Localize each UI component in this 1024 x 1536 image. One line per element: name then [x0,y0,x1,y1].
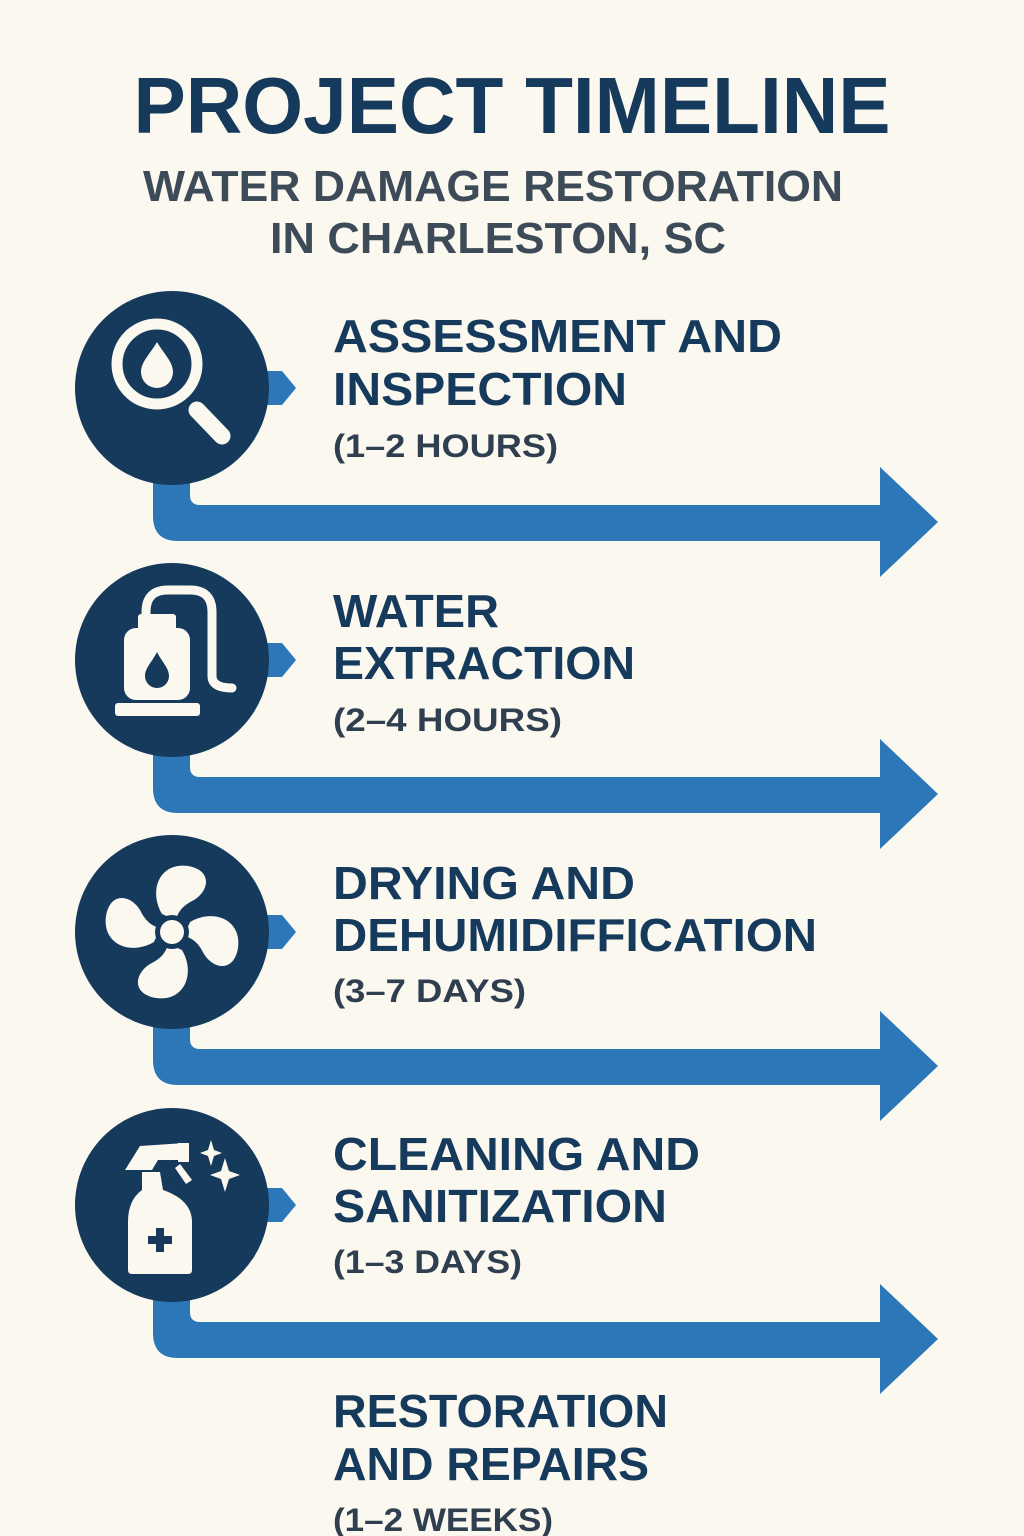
icon: magnifier with drop [75,291,296,485]
step 3: drying: DEHUMIDIFFICATION [333,909,817,961]
step 5: restoration [333,1385,668,1536]
step 2: extraction [75,563,635,757]
step 3: drying [75,835,817,1029]
step 5: restoration: AND REPAIRS [333,1438,649,1490]
step 4: cleaning [75,1108,700,1302]
duration: (1–2 HOURS) [333,428,558,464]
subtitle [143,162,843,263]
duration: (3–7 DAYS) [333,973,526,1009]
heading: WATER [333,585,499,637]
heading: ASSESSMENT AND [333,310,782,362]
step 4: cleaning: SANITIZATION [333,1180,667,1232]
title: PROJECT TIMELINE [134,61,890,150]
heading: DRYING AND [333,857,635,909]
subtitle: IN CHARLESTON, SC [270,214,726,263]
icon: spray bottle [75,1108,296,1302]
icon: wet vac [75,563,296,757]
arrow: step 1 to 2 [153,467,938,577]
subtitle: WATER DAMAGE RESTORATION [143,162,843,211]
step 1: assessment: INSPECTION [333,363,627,415]
arrow: step 2 to 3 [153,739,938,849]
heading: RESTORATION [333,1385,668,1437]
step 2: extraction: EXTRACTION [333,637,635,689]
heading: CLEANING AND [333,1128,700,1180]
arrow: step 3 to 4 [153,1011,938,1121]
duration: (1–3 DAYS) [333,1244,522,1280]
step 1: assessment [75,291,782,485]
duration: (2–4 HOURS) [333,702,562,738]
arrow: step 4 to 5 [153,1284,938,1394]
icon: fan [75,835,296,1029]
